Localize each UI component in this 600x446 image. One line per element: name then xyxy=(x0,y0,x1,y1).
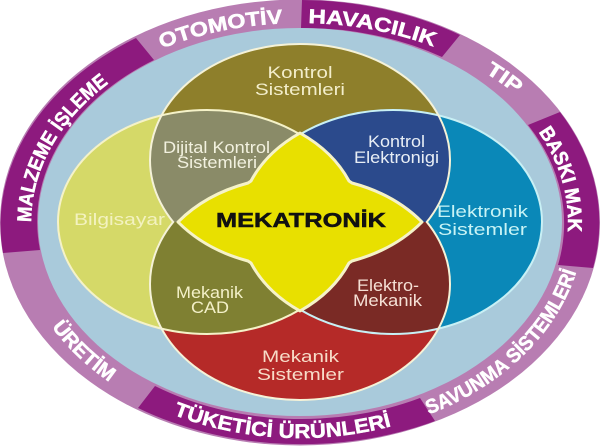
label: Savunma Sistemleri: SAVUNMA SİSTEMLERİ xyxy=(426,268,576,414)
circle: Elektronik Sistemler xyxy=(244,110,542,334)
title: Mekatronik: MEKATRONİK xyxy=(216,209,387,232)
text: Mekanik Sistemler xyxy=(257,348,345,384)
text: Kontrol Sistemleri: Sistemleri xyxy=(255,81,345,99)
text: Elektro-Mekanik xyxy=(353,277,423,310)
text: Elektro-Mekanik: Mekanik xyxy=(353,292,423,310)
label: Baskı Mak: BASKI MAK xyxy=(538,125,582,232)
text: Bilgisayar: Bilgisayar xyxy=(74,211,166,229)
text: Kontrol Elektronigi: Elektronigi xyxy=(354,149,439,167)
circle: Mekanik Sistemler xyxy=(150,168,450,400)
circle: Kontrol Sistemleri xyxy=(150,44,450,276)
label: Tıp: TIP xyxy=(489,60,522,88)
text: Dijital Kontrol Sistemleri xyxy=(163,139,270,172)
text: Kontrol Sistemleri: Kontrol xyxy=(268,64,332,82)
text: Dijital Kontrol Sistemleri: Sistemleri xyxy=(177,154,257,172)
ring segment: Baskı Mak xyxy=(528,112,599,268)
text: Kontrol Elektronigi: Kontrol xyxy=(368,133,425,151)
overlap: Elektro-Mekanik xyxy=(304,222,449,333)
overlap: Dijital Kontrol Sistemleri xyxy=(151,111,296,222)
text: Mekanik CAD: Mekanik xyxy=(176,284,244,302)
ring segment: Tüketici Ürünleri xyxy=(138,386,435,444)
label: Tüketici Ürünleri: TÜKETİCİ ÜRÜNLERİ xyxy=(177,402,390,438)
text: Mekanik CAD xyxy=(176,284,244,317)
text: Mekanik Sistemler: Mekanik xyxy=(262,348,340,366)
text: Elektronik Sistemler xyxy=(437,203,529,239)
label: Üretim: ÜRETİM xyxy=(54,319,117,382)
ring segment: Malzeme İşleme xyxy=(1,38,154,253)
text: Elektronik Sistemler: Sistemler xyxy=(438,221,528,239)
label: Otomotiv: OTOMOTİV xyxy=(159,7,282,46)
text: Mekanik CAD: CAD xyxy=(191,299,229,317)
label: Havacılık: HAVACILIK xyxy=(310,9,438,47)
text: Mekanik Sistemler: Sistemler xyxy=(257,366,345,384)
venn diagram xyxy=(58,44,542,400)
text: Dijital Kontrol Sistemleri: Dijital Kontrol xyxy=(163,139,270,157)
text: Kontrol Sistemleri xyxy=(255,64,345,99)
overlap: Kontrol Elektronigi xyxy=(304,111,449,222)
overlap: Mekanik CAD xyxy=(151,222,296,333)
text: Elektronik Sistemler: Elektronik xyxy=(437,203,529,221)
label: Malzeme İşleme: MALZEME İŞLEME xyxy=(17,72,108,222)
circle outlines xyxy=(58,44,542,400)
center shape: Mekatronik xyxy=(178,133,422,311)
ring segment: Havacılık xyxy=(301,0,460,57)
circle: Bilgisayar xyxy=(58,110,356,334)
text: Elektro-Mekanik: Elektro- xyxy=(357,277,419,295)
inner light blue disc xyxy=(38,28,562,416)
text: Kontrol Elektronigi xyxy=(354,133,439,167)
